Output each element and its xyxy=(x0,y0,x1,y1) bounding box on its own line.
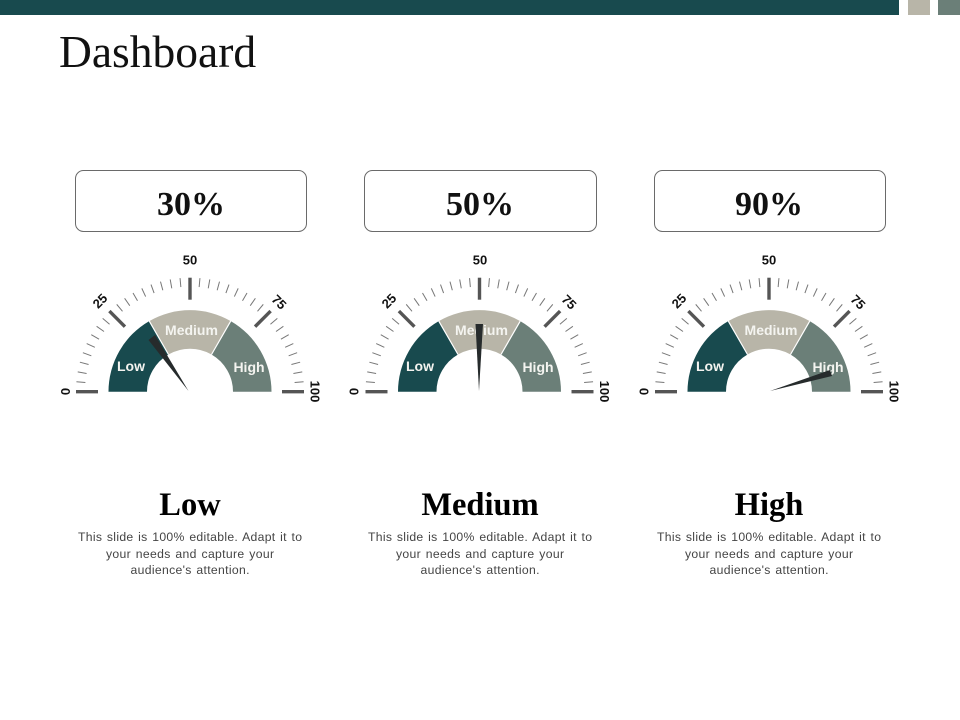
description: your needs and capture your xyxy=(396,547,564,561)
value box: 90%: 90% xyxy=(735,186,803,223)
segment labels: Low xyxy=(696,358,724,374)
scale labels: 0 xyxy=(58,388,73,395)
scale labels: 50 xyxy=(183,252,197,268)
description xyxy=(78,530,302,577)
scale labels: 50 xyxy=(762,252,776,268)
gauge: 50% xyxy=(346,252,612,402)
title: Dashboard xyxy=(59,26,256,77)
scale labels: 75 xyxy=(848,292,868,312)
needle xyxy=(148,335,188,391)
description xyxy=(657,530,881,577)
top right square: grey green xyxy=(938,0,960,15)
description: This slide is 100% editable. Adapt it to xyxy=(657,530,881,544)
description: audience's attention. xyxy=(130,563,250,577)
top right square: beige xyxy=(908,0,930,15)
scale labels: 0 xyxy=(636,388,652,395)
segment labels: High xyxy=(233,359,265,375)
description: audience's attention. xyxy=(420,563,540,577)
scale labels: 0 xyxy=(346,388,362,395)
description: your needs and capture your xyxy=(685,547,853,561)
scale labels: 50 xyxy=(473,252,487,268)
segment labels xyxy=(696,322,844,375)
scale labels: 25 xyxy=(90,291,110,311)
value box: 90% xyxy=(654,170,886,232)
description: audience's attention. xyxy=(710,563,828,577)
segment labels: Medium xyxy=(455,322,508,338)
segment labels: High xyxy=(812,359,844,375)
segment labels: Medium xyxy=(165,322,218,338)
scale labels xyxy=(346,252,612,402)
segment labels xyxy=(117,322,265,375)
heading: Medium xyxy=(421,487,539,523)
gauge: 30% xyxy=(58,252,322,402)
segment labels: Low xyxy=(117,358,145,374)
top bar xyxy=(0,0,899,15)
needle xyxy=(770,370,832,391)
heading: High xyxy=(735,487,803,523)
panel: medium gauge xyxy=(346,170,612,577)
scale labels: 100 xyxy=(597,381,612,402)
description: This slide is 100% editable. Adapt it to xyxy=(78,530,302,544)
value box: 50%: 50% xyxy=(446,186,514,223)
value box: 50% xyxy=(364,170,596,232)
gauge: 90% xyxy=(636,252,902,402)
segment labels xyxy=(406,322,554,375)
scale labels: 100 xyxy=(308,381,322,402)
heading: Low xyxy=(159,487,221,523)
panel: high gauge xyxy=(636,170,902,577)
scale labels xyxy=(58,252,322,402)
segment labels: Low xyxy=(406,358,434,374)
scale labels: 25 xyxy=(669,291,689,311)
value box: 30%: 30% xyxy=(157,186,225,223)
scale labels: 75 xyxy=(269,292,289,312)
needle xyxy=(476,324,483,391)
scale labels: 75 xyxy=(559,292,579,312)
panel: low gauge xyxy=(58,170,322,577)
description: your needs and capture your xyxy=(106,547,274,561)
description xyxy=(368,530,592,577)
segment labels: High xyxy=(522,359,554,375)
scale labels xyxy=(636,252,902,402)
segment labels: Medium xyxy=(745,322,797,338)
value box: 30% xyxy=(76,170,306,232)
scale labels: 100 xyxy=(886,381,902,402)
description: This slide is 100% editable. Adapt it to xyxy=(368,530,592,544)
scale labels: 25 xyxy=(379,291,399,311)
